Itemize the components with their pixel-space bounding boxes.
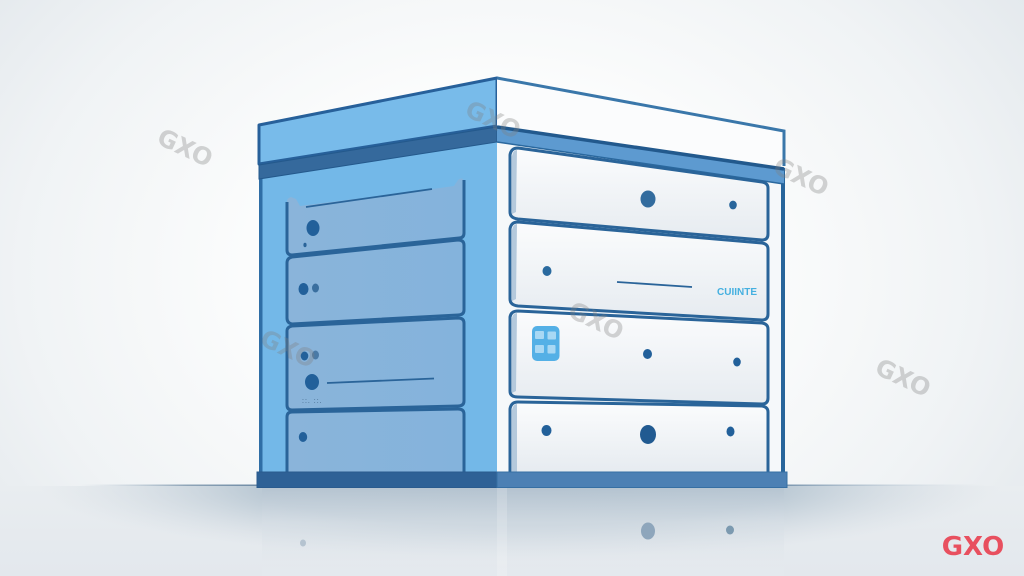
watermark 1: GXO <box>153 123 217 173</box>
drawer 2 indicator <box>542 266 552 276</box>
drawer 1 side shade <box>512 150 517 214</box>
drawer 1 slot <box>306 189 432 207</box>
drawer 3 indicators <box>301 352 308 360</box>
lid left band <box>259 127 497 179</box>
drawer 2 indicators <box>298 283 308 295</box>
drawer 4 indicator <box>299 432 307 442</box>
right drawer 4 <box>510 402 768 473</box>
left drawer 4 <box>287 409 464 473</box>
watermarks <box>153 95 935 403</box>
drawer 3 tiny label: ::. ::. <box>302 398 323 405</box>
reflected dot left <box>300 540 306 546</box>
server cabinet <box>257 78 787 488</box>
right body face <box>497 140 783 473</box>
watermark 5: GXO <box>256 324 320 374</box>
watermark 2: GXO <box>461 95 525 145</box>
right drawer 2 <box>510 222 768 320</box>
base plinth left <box>257 472 497 488</box>
drawer 1 small indicator <box>303 243 307 247</box>
lid right outline <box>497 78 784 166</box>
horizon line right <box>787 484 987 486</box>
drawer 3 indicators <box>643 349 652 359</box>
lid right band top stroke <box>497 127 784 169</box>
drawer 3 large indicator <box>305 374 319 390</box>
drawer 2 label: CUIINTE <box>717 286 757 298</box>
reflected dot centre <box>641 522 655 540</box>
left body edge <box>259 170 262 473</box>
horizon line left <box>80 484 258 486</box>
right drawer 3 <box>510 311 768 404</box>
drawer 4 indicators <box>542 425 552 436</box>
icon: four-pane grid <box>532 326 560 361</box>
brand mark: GXO <box>942 532 1004 562</box>
watermark 4: GXO <box>564 296 628 346</box>
left drawer 3 <box>287 318 464 410</box>
right drawer 1 <box>510 148 768 240</box>
left body face <box>259 138 497 473</box>
lid right band <box>497 127 784 184</box>
drawer 1 indicators <box>640 190 656 208</box>
drawer 3 slot <box>327 378 434 383</box>
drawer 1 frame <box>287 180 464 255</box>
left drawer 2 <box>287 240 464 324</box>
drawer 3 side shade <box>512 313 517 393</box>
lid right band bottom stroke <box>497 142 784 184</box>
drawer 4 side shade <box>512 404 517 473</box>
base plinth right <box>497 472 787 488</box>
reflected dot right <box>726 526 734 534</box>
watermark 3: GXO <box>769 152 833 202</box>
right body edge <box>781 168 785 473</box>
lid right face <box>497 78 784 166</box>
lid left face <box>259 78 497 164</box>
reflective floor <box>0 486 1024 576</box>
drawer 2 slot <box>617 282 692 287</box>
left drawer 1 <box>287 178 464 255</box>
watermark 6: GXO <box>871 353 935 403</box>
drawer 1 indicator <box>306 220 320 236</box>
drawer 2 side shade <box>512 224 517 301</box>
